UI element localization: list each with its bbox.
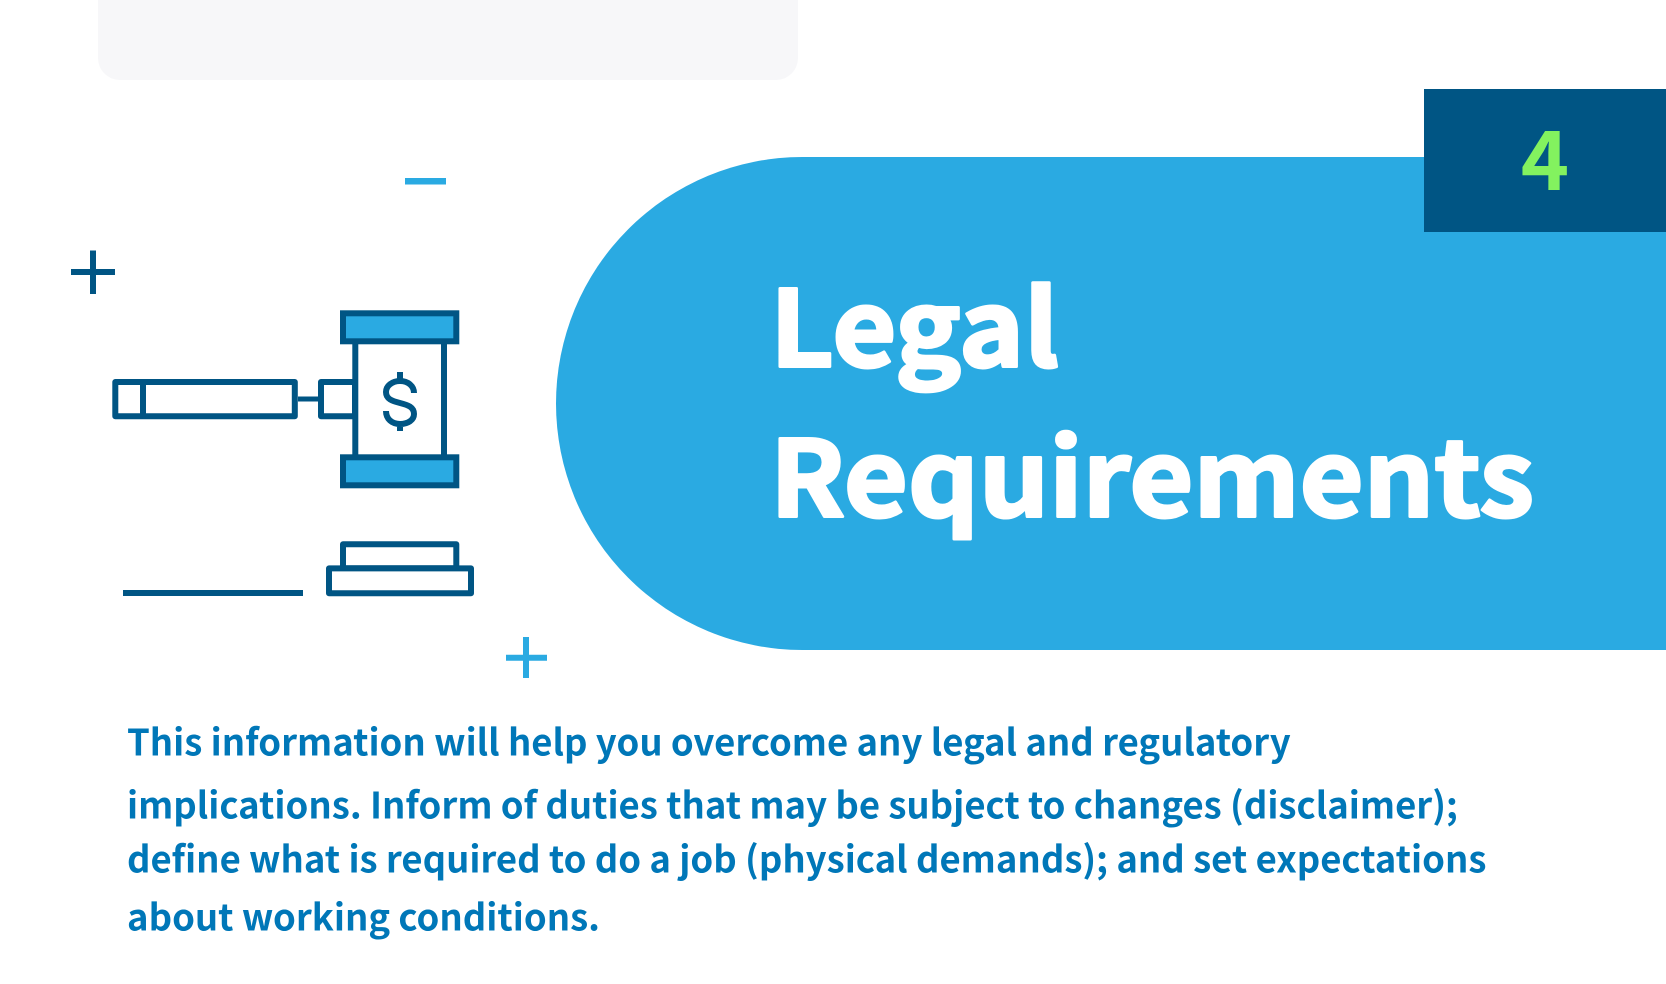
number badge [1424, 89, 1666, 232]
body text: implications. Inform of duties that may be subject to changes (disclaimer); [127, 776, 1458, 830]
gavel bottom cap [343, 457, 456, 485]
title: Requirements [770, 396, 1534, 548]
sound block base [329, 568, 471, 593]
title band [556, 157, 1666, 650]
body text: about working conditions. [127, 888, 600, 942]
gavel neck [321, 382, 355, 416]
sound block top [343, 544, 456, 568]
gavel connector [298, 396, 318, 402]
ground line [123, 590, 303, 596]
decorative plus light [506, 637, 547, 678]
body text [127, 714, 1486, 942]
gavel handle [115, 382, 295, 416]
title [770, 246, 1534, 548]
body text: This information will help you overcome any legal and regulatory [127, 714, 1291, 766]
icon: gavel with dollar sign [115, 313, 471, 593]
number badge: 4 [1521, 95, 1569, 214]
dollar sign [386, 372, 414, 431]
decorative minus [405, 178, 446, 184]
title: Legal [770, 246, 1059, 398]
top grey card [98, 0, 798, 80]
gavel top cap [343, 313, 456, 341]
gavel head body [355, 344, 444, 455]
decorative plus dark [71, 250, 115, 294]
body text: define what is required to do a job (physical demands); and set expectations [127, 830, 1486, 884]
